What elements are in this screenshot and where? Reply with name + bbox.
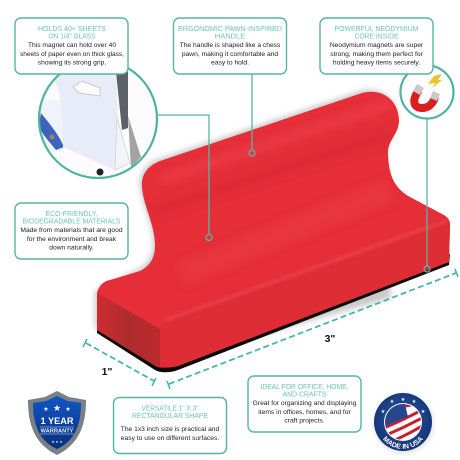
panel: eco-friendly: down naturally.: [49, 244, 94, 252]
photo: stacked paper: [55, 74, 118, 170]
black base: [97, 254, 450, 372]
badge: made in USA seal: [373, 393, 435, 455]
panel: neodymium core: POWERFUL NEODYMIUM: [334, 24, 418, 33]
panel: holds 40+ sheets: showing its strong grip.: [38, 60, 106, 66]
panel: holds 40+ sheets: [15, 18, 128, 74]
photo: dark edge strip: [116, 72, 128, 130]
handle valley shading: [150, 134, 392, 212]
leader line: ergonomic handle: [249, 74, 255, 156]
panel: eco-friendly: for the environment and break: [27, 236, 117, 243]
panel: holds 40+ sheets: This magnet can hold over 40: [28, 42, 116, 49]
badge: made in USA seal: ★: [401, 397, 406, 403]
panel: neodymium core: Neodymium magnets are super: [330, 42, 424, 49]
leader line: handle shape from photo circle: [158, 115, 212, 240]
photo: backdrop art: [38, 100, 64, 152]
dimension: 1 inch: [83, 339, 156, 386]
panel: ergonomic handle: easy to hold.: [211, 60, 249, 66]
left end side: [97, 293, 160, 370]
panel: holds 40+ sheets: ON 1/4" GLASS: [48, 32, 96, 40]
badge: 1 year warranty shield: ★: [53, 403, 61, 413]
panel: ergonomic handle: [174, 18, 286, 74]
panel: eco-friendly: BIODEGRADABLE MATERIALS: [22, 216, 120, 226]
panel: versatile shape: RECTANGULAR SHAPE: [132, 411, 208, 420]
panel: eco-friendly: ECO-FRIENDLY,: [46, 209, 98, 218]
panel: ideal for office: Great for organizing and displaying: [253, 400, 357, 407]
product: red pawn-shaped magnet: [95, 90, 450, 375]
badge: 1 year warranty shield: [28, 391, 86, 455]
panel: ideal for office: craft projects.: [284, 418, 325, 424]
panel: ideal for office: [248, 376, 361, 432]
panel: ergonomic handle: The handle is shaped like a chess: [180, 42, 281, 49]
badge: made in USA seal: ★: [390, 399, 395, 405]
front face: [160, 221, 450, 375]
panel: holds 40+ sheets: sheets of paper even on thick glass,: [20, 51, 124, 58]
dimension: 3 inch: [167, 269, 458, 389]
panel: eco-friendly: [15, 203, 128, 259]
panel: ideal for office: items in offices, homes, and for: [258, 409, 351, 416]
panel: neodymium core: strong, making them perfect for: [330, 51, 424, 58]
horseshoe: [414, 90, 435, 108]
badge: 1 year warranty shield: ★: [65, 406, 71, 413]
panel: neodymium core: CORE INSIDE: [354, 32, 398, 40]
panel: ergonomic handle: pawn, making it comfortable and: [182, 51, 278, 58]
panel: glass photo circle: [38, 60, 157, 178]
badge: made in USA seal: ★: [412, 399, 417, 405]
handle crest highlight: [160, 104, 390, 180]
panel: neodymium core: holding heavy items securely.: [333, 60, 420, 66]
panel: versatile shape: easy to use on different surfaces.: [121, 435, 219, 442]
panel: ergonomic handle: HANDLE: [215, 32, 245, 40]
badge: made in USA seal: ★: [421, 409, 426, 415]
badge: 1 year warranty shield: WARRANTY: [40, 428, 74, 434]
photo: magnet on paper: [73, 81, 100, 96]
badge: made in USA seal: MADE IN USA: [383, 436, 424, 449]
main body: [97, 92, 450, 368]
panel: eco-friendly: Made from materials that are good: [20, 227, 123, 234]
dimension: 3 inch: 3": [325, 333, 335, 345]
panel: holds 40+ sheets: HOLDS 40+ SHEETS: [38, 24, 106, 33]
photo: wall shadow: [128, 116, 141, 168]
panel: versatile shape: [114, 398, 226, 454]
dimension: 1 inch: 1": [102, 366, 112, 378]
panel: versatile shape: VERSATILE 1" X 3": [142, 404, 199, 412]
spark: [428, 74, 442, 88]
badge: 1 year warranty shield: 1 YEAR: [40, 416, 74, 426]
panel: ideal for office: AND CRAFTS: [282, 390, 326, 398]
icon: horseshoe magnet circle: [400, 66, 454, 118]
badge: 1 year warranty shield: ★ ★ ★: [51, 440, 64, 444]
middle highlight: [180, 190, 390, 275]
badge: 1 year warranty shield: ★: [43, 406, 49, 413]
panel: versatile shape: The 1x3 inch size is practical and: [121, 426, 220, 433]
panel: ideal for office: IDEAL FOR OFFICE, HOME,: [260, 382, 348, 391]
ridge highlight: [166, 221, 447, 320]
panel: neodymium core: [320, 18, 433, 74]
badge: made in USA seal: ★: [381, 409, 386, 415]
leader line: magnet core: [424, 118, 430, 272]
panel: ergonomic handle: ERGONOMIC PAWN-INSPIRED: [178, 24, 283, 33]
